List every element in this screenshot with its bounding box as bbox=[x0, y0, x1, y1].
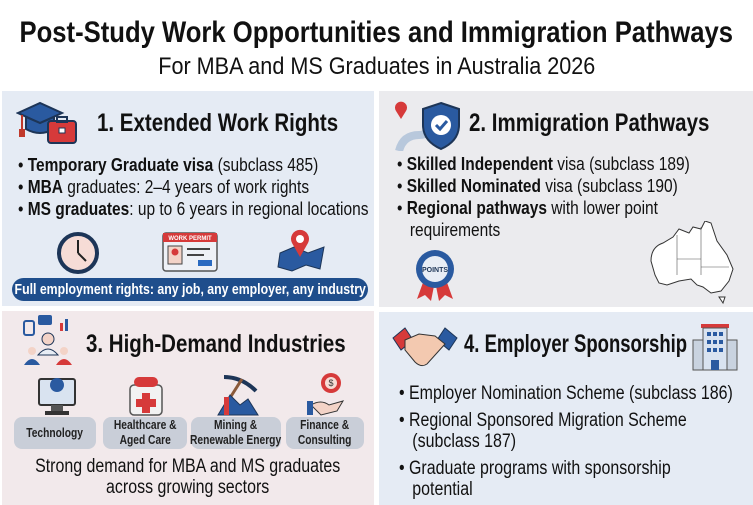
panel: employer sponsorship bbox=[379, 312, 753, 505]
icon: points badge: POINTS bbox=[422, 267, 448, 274]
bullets: • Regional pathways with lower point bbox=[397, 198, 658, 218]
bullets: • Temporary Graduate visa (subclass 485) bbox=[18, 155, 318, 175]
icon: mining bbox=[217, 375, 259, 416]
icon: finance bbox=[307, 373, 344, 416]
bullets: • MS graduates: up to 6 years in regional locations bbox=[18, 199, 368, 219]
icon: handshake bbox=[392, 327, 458, 366]
title: Post-Study Work Opportunities and Immigration Pathways bbox=[20, 16, 733, 49]
icon: finance: $ bbox=[328, 378, 334, 388]
summary text: across growing sectors bbox=[106, 477, 270, 498]
bullets bbox=[399, 383, 733, 500]
icon: road and shield bbox=[395, 102, 460, 151]
icon: australia map bbox=[650, 221, 734, 304]
label: technology bbox=[14, 417, 96, 449]
icon: clock bbox=[57, 232, 99, 274]
panel: extended work rights bbox=[2, 91, 374, 306]
bullets: • Skilled Nominated visa (subclass 190) bbox=[397, 176, 678, 196]
label: healthcare bbox=[103, 417, 187, 449]
bullets bbox=[18, 155, 368, 219]
heading: 2. Immigration Pathways bbox=[469, 109, 709, 137]
label: healthcare: Aged Care bbox=[119, 433, 171, 447]
summary text: Strong demand for MBA and MS graduates bbox=[35, 456, 341, 477]
label: mining: Mining & bbox=[214, 418, 258, 432]
heading: 3. High-Demand Industries bbox=[86, 330, 346, 358]
callout pill: Full employment rights: any job, any employer, any industry bbox=[14, 281, 366, 298]
icon: work permit: WORK PERMIT bbox=[168, 236, 212, 242]
icon: building bbox=[692, 324, 738, 370]
subtitle: For MBA and MS Graduates in Australia 2026 bbox=[158, 53, 595, 80]
icon: healthcare bbox=[129, 377, 163, 416]
bullets: requirements bbox=[410, 220, 500, 240]
label: finance bbox=[286, 417, 364, 449]
icon: work permit bbox=[162, 232, 218, 272]
bullets: • Employer Nomination Scheme (subclass 186) bbox=[399, 383, 733, 404]
label: mining bbox=[191, 417, 281, 449]
heading: 1. Extended Work Rights bbox=[97, 109, 338, 137]
label: technology: Technology bbox=[27, 426, 83, 440]
bullets: • MBA graduates: 2–4 years of work rights bbox=[18, 177, 309, 197]
panel: high-demand industries bbox=[2, 311, 374, 505]
icon: map pin bbox=[277, 230, 325, 272]
bullets: • Skilled Independent visa (subclass 189) bbox=[397, 154, 690, 174]
bullets: potential bbox=[412, 479, 473, 500]
icon: points badge bbox=[416, 250, 454, 301]
summary text bbox=[35, 456, 341, 498]
icon: people network bbox=[23, 315, 72, 365]
heading: 4. Employer Sponsorship bbox=[464, 330, 687, 358]
panel: immigration pathways bbox=[379, 91, 753, 307]
bullets: • Regional Sponsored Migration Scheme bbox=[399, 410, 687, 431]
bullets: (subclass 187) bbox=[412, 431, 516, 452]
bullets: • Graduate programs with sponsorship bbox=[399, 458, 671, 479]
bullets bbox=[397, 154, 690, 240]
icon: cap and briefcase bbox=[16, 102, 77, 144]
label: finance: Consulting bbox=[298, 433, 352, 447]
icon: technology bbox=[38, 378, 76, 415]
label: mining: Renewable Energy bbox=[190, 433, 282, 447]
label: finance: Finance & bbox=[300, 418, 349, 432]
label: healthcare: Healthcare & bbox=[114, 418, 176, 432]
